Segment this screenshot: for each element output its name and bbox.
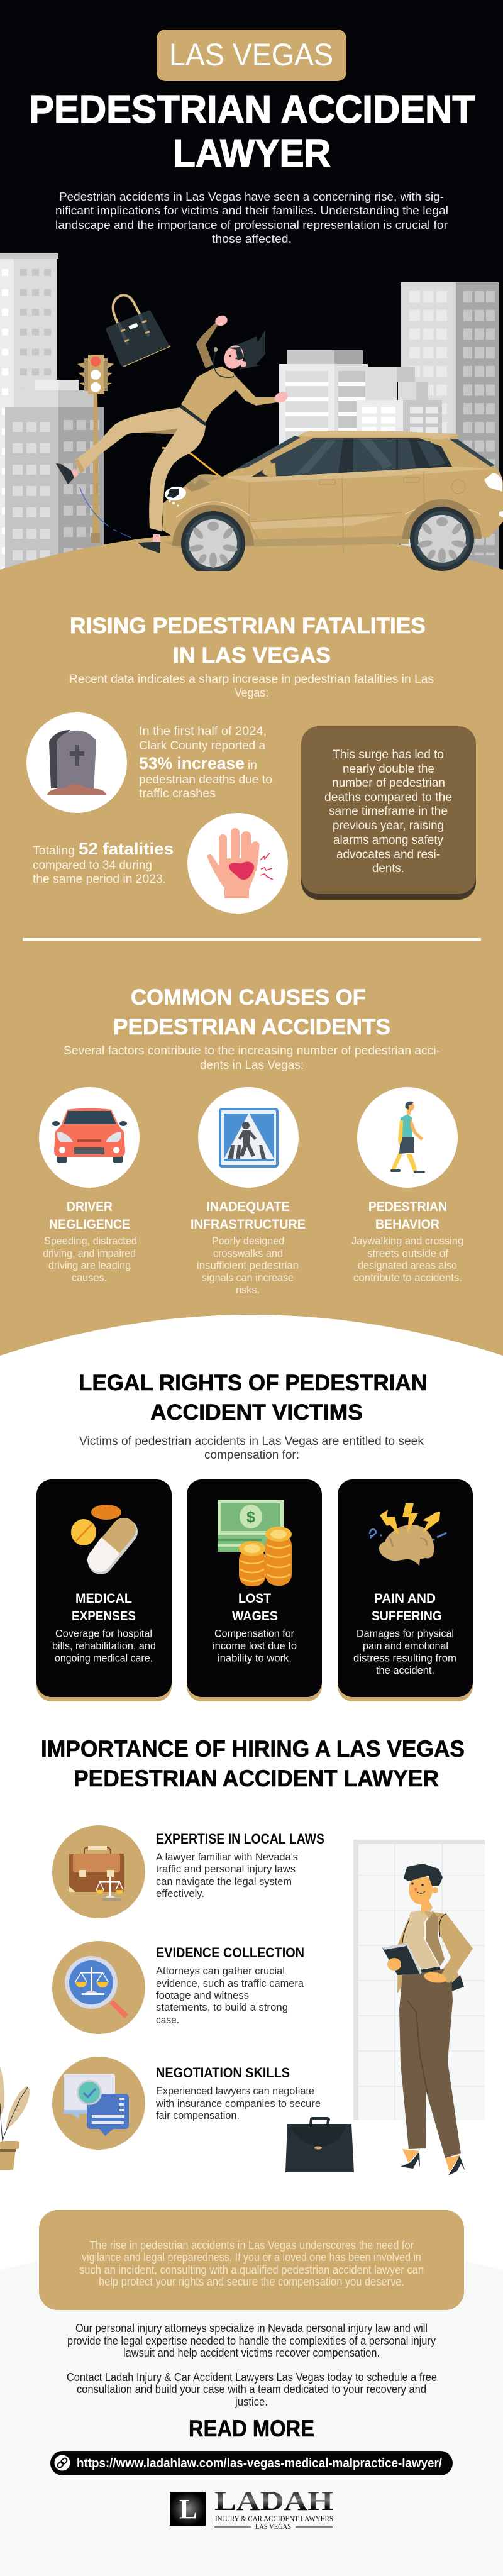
cause: driver negligence: driving are leading <box>48 1259 131 1271</box>
icon: brain with lightning <box>370 1503 446 1566</box>
falling woman <box>56 314 289 553</box>
card: medical expenses: Coverage for hospital <box>55 1627 152 1640</box>
cause: driver negligence: Speeding, distracted <box>44 1235 137 1247</box>
cause: inadequate infrastructure: risks. <box>236 1284 260 1296</box>
section: legal rights heading: LEGAL RIGHTS OF PEDESTRIAN <box>79 1371 427 1395</box>
stat: 52 fatalities: Totaling <box>33 844 75 858</box>
right buildings <box>279 282 499 578</box>
potted plant <box>0 2067 30 2170</box>
callout: surge box: This surge has led to <box>333 748 444 761</box>
cause: inadequate infrastructure: signals can increase <box>202 1271 294 1284</box>
stat: 53% increase <box>139 725 272 800</box>
title <box>29 88 475 175</box>
car <box>162 431 503 553</box>
card: pain and suffering: the accident. <box>376 1664 434 1676</box>
cause: inadequate infrastructure <box>191 1200 306 1296</box>
importance: evidence collection: statements, to build a strong <box>156 2001 288 2013</box>
read more heading: READ MORE <box>189 2416 314 2441</box>
callout: surge box <box>301 726 476 900</box>
title: LAWYER <box>173 132 331 175</box>
callout: surge box: dents. <box>372 862 404 875</box>
legal rights intro <box>79 1435 424 1462</box>
importance: evidence collection <box>156 1945 304 2026</box>
section: legal rights heading: ACCIDENT VICTIMS <box>150 1400 363 1425</box>
icon: tombstone <box>26 712 127 813</box>
closing paragraph: contact: consultation and build your case with a team dedicated to your recovery and <box>77 2383 426 2396</box>
conclusion box: such an incident, consulting with a qualified pedestrian accident lawyer can <box>79 2264 424 2276</box>
link pill: https://www.ladahlaw.com/las-vegas-medical-malpractice-lawyer/ <box>77 2457 442 2470</box>
conclusion box: help protect your rights and secure the compensation you deserve. <box>99 2275 404 2288</box>
cause: driver negligence <box>43 1200 137 1284</box>
black briefcase <box>285 2117 354 2172</box>
icon: pedestrian crossing sign <box>198 1087 299 1188</box>
conclusion box: vigilance and legal preparedness. If you or a loved one has been involved in <box>82 2251 421 2264</box>
closing paragraph: attorneys: provide the legal expertise needed to handle the complexities of a personal injury <box>67 2335 436 2347</box>
section: rising fatalities heading <box>70 614 426 668</box>
card: lost wages: WAGES <box>232 1609 278 1623</box>
section: legal rights heading <box>79 1371 427 1425</box>
badge: Las Vegas: LAS VEGAS <box>169 37 333 72</box>
callout: surge box: previous year, raising <box>333 819 444 832</box>
section: common causes heading <box>113 985 390 1039</box>
lawyer figure <box>382 1864 473 2175</box>
window backdrop <box>353 1840 485 2120</box>
logo: LADAH <box>214 2487 333 2516</box>
intro paragraph: Pedestrian accidents in Las Vegas have seen a concerning rise, with sig- <box>59 191 444 203</box>
logo <box>170 2487 333 2531</box>
callout: surge box: deaths compared to the <box>324 791 452 804</box>
fatalities intro: Recent data indicates a sharp increase in pedestrian fatalities in Las <box>69 673 434 686</box>
card: pain and suffering: distress resulting from <box>353 1652 456 1664</box>
flying handbag <box>108 295 171 367</box>
section: rising fatalities heading: IN LAS VEGAS <box>173 643 331 668</box>
cause: pedestrian behavior: PEDESTRIAN <box>368 1200 447 1214</box>
conclusion box <box>39 2210 464 2310</box>
causes intro: Several factors contribute to the increasing number of pedestrian acci- <box>64 1044 440 1058</box>
section: importance heading: IMPORTANCE OF HIRING A LAS VEGAS <box>41 1736 465 1762</box>
importance: negotiation skills: Experienced lawyers can negotiate <box>156 2085 314 2097</box>
cause: driver negligence: causes. <box>72 1271 107 1284</box>
closing paragraph: attorneys: Our personal injury attorneys specialize in Nevada personal injury law and will <box>75 2322 428 2335</box>
conclusion box: The rise in pedestrian accidents in Las Vegas underscores the need for <box>89 2239 414 2252</box>
cause: inadequate infrastructure: INFRASTRUCTURE <box>191 1217 306 1232</box>
intro paragraph <box>55 191 448 245</box>
importance: expertise in local laws: A lawyer familiar with Nevada's <box>156 1851 298 1863</box>
cause: inadequate infrastructure: crosswalks and <box>213 1247 283 1259</box>
importance: evidence collection: evidence, such as traffic camera <box>156 1977 304 1989</box>
card: lost wages: income lost due to <box>213 1640 297 1652</box>
importance: evidence collection: Attorneys can gather crucial <box>156 1965 285 1977</box>
cause: driver negligence: NEGLIGENCE <box>49 1217 130 1232</box>
cause: pedestrian behavior: streets outside of <box>367 1247 448 1259</box>
importance: evidence collection: case. <box>156 2014 179 2026</box>
importance: negotiation skills <box>155 2065 321 2121</box>
closing paragraph: contact <box>67 2371 437 2408</box>
stat: 53% increase: 53% increase <box>139 754 245 773</box>
stat: 53% increase: pedestrian deaths due to <box>139 773 272 787</box>
icon: pills <box>71 1505 125 1562</box>
card: medical expenses <box>36 1479 172 1701</box>
card: lost wages: inability to work. <box>218 1652 292 1664</box>
icon: money and coins: $ <box>246 1508 255 1526</box>
importance: expertise in local laws: traffic and personal injury laws <box>156 1863 296 1875</box>
cause: inadequate infrastructure: INADEQUATE <box>206 1200 290 1214</box>
yellow tape <box>162 448 221 477</box>
closing paragraph: contact: justice. <box>235 2396 268 2408</box>
callout: surge box: number of pedestrian <box>332 777 445 790</box>
fatalities intro: Vegas: <box>235 687 268 700</box>
title: PEDESTRIAN ACCIDENT <box>29 88 475 131</box>
stat: 53% increase: in <box>248 759 257 772</box>
importance: evidence collection: EVIDENCE COLLECTION <box>156 1945 304 1960</box>
cause: pedestrian behavior: designated areas also <box>358 1259 457 1271</box>
importance: expertise in local laws: EXPERTISE IN LOCAL LAWS <box>156 1831 324 1847</box>
cause: pedestrian behavior: contribute to accidents. <box>353 1271 462 1284</box>
importance: evidence collection: footage and witness <box>156 1989 249 2001</box>
intro paragraph: those affected. <box>212 233 292 245</box>
cause: inadequate infrastructure: insufficient pedestrian <box>197 1259 299 1271</box>
left buildings <box>0 253 104 577</box>
icon: magnifier with scales <box>52 1941 145 2034</box>
card: lost wages: LOST <box>238 1591 271 1606</box>
importance: expertise in local laws: effectively. <box>156 1888 204 1899</box>
stat: 53% increase: In the first half of 2024, <box>139 725 267 738</box>
importance: expertise in local laws <box>156 1831 324 1899</box>
card: pain and suffering: PAIN AND <box>374 1591 436 1606</box>
importance: expertise in local laws: can navigate the legal system <box>156 1876 292 1888</box>
card: pain and suffering <box>338 1479 473 1701</box>
importance: negotiation skills: fair compensation. <box>156 2109 240 2121</box>
cause: inadequate infrastructure: Poorly designed <box>212 1235 284 1247</box>
section: importance heading: PEDESTRIAN ACCIDENT LAWYER <box>74 1766 439 1791</box>
icon: walking person <box>357 1087 458 1188</box>
card: pain and suffering: SUFFERING <box>372 1609 442 1623</box>
section: importance heading <box>41 1736 465 1791</box>
card: medical expenses: EXPENSES <box>72 1609 136 1623</box>
card: lost wages: Compensation for <box>214 1627 294 1640</box>
icon: injured hand <box>187 813 288 914</box>
logo: L <box>179 2494 197 2524</box>
stat: 52 fatalities: compared to 34 during <box>33 859 152 872</box>
intro paragraph: nificant implications for victims and their families. Understanding the legal <box>55 204 448 217</box>
badge: Las Vegas <box>157 30 346 81</box>
closing paragraph: attorneys: lawsuit and help accident victims recover compensation. <box>123 2347 380 2359</box>
icon: link <box>54 2455 70 2471</box>
closing paragraph: contact: Contact Ladah Injury & Car Accident Lawyers Las Vegas today to schedule a free <box>67 2371 437 2384</box>
hero background <box>0 0 503 578</box>
causes intro <box>64 1044 440 1072</box>
callout: surge box: advocates and resi- <box>336 848 440 861</box>
traffic light <box>77 355 114 543</box>
cause: driver negligence: driving, and impaired <box>43 1247 136 1259</box>
intro paragraph: landscape and the importance of professional representation is crucial for <box>55 219 448 231</box>
cause: driver negligence: DRIVER <box>67 1200 113 1214</box>
rear wheel <box>410 507 474 571</box>
stat: 53% increase: traffic crashes <box>139 787 216 800</box>
icon: briefcase with scales <box>52 1825 145 1918</box>
callout: surge box: nearly double the <box>343 763 434 776</box>
stat: 52 fatalities: the same period in 2023. <box>33 873 166 886</box>
section: common causes heading: PEDESTRIAN ACCIDENTS <box>113 1015 390 1039</box>
icon: red car <box>39 1087 140 1188</box>
card: pain and suffering: pain and emotional <box>363 1640 448 1652</box>
importance: negotiation skills: with insurance companies to secure <box>155 2098 321 2109</box>
stat: 52 fatalities: 52 fatalities <box>79 839 174 858</box>
callout: surge box: alarms among safety <box>333 834 443 847</box>
closing paragraph: attorneys <box>67 2322 436 2359</box>
fatalities intro <box>69 673 434 700</box>
legal rights intro: compensation for: <box>204 1449 299 1462</box>
card: lost wages <box>187 1479 322 1701</box>
white section background <box>0 1315 503 2289</box>
card: pain and suffering: Damages for physical <box>357 1627 454 1640</box>
front wheel <box>181 511 245 575</box>
icon: money and coins <box>218 1500 292 1586</box>
callout: surge box: same timeframe in the <box>329 805 448 818</box>
importance: negotiation skills: NEGOTIATION SKILLS <box>156 2065 290 2081</box>
legal rights intro: Victims of pedestrian accidents in Las Vegas are entitled to seek <box>79 1435 424 1448</box>
cause: pedestrian behavior <box>351 1200 463 1284</box>
card: medical expenses: MEDICAL <box>75 1591 132 1606</box>
logo: LAS VEGAS <box>255 2522 291 2531</box>
stat: 53% increase: Clark County reported a <box>139 739 265 753</box>
lower pale background <box>0 2238 503 2576</box>
ground curve and gold section background <box>0 531 503 1364</box>
section: rising fatalities heading: RISING PEDESTRIAN FATALITIES <box>70 614 426 638</box>
section: common causes heading: COMMON CAUSES OF <box>131 985 366 1010</box>
stat: 52 fatalities <box>33 839 174 886</box>
cause: pedestrian behavior: BEHAVIOR <box>375 1217 439 1232</box>
card: medical expenses: ongoing medical care. <box>55 1652 153 1664</box>
link pill <box>50 2451 453 2475</box>
logo: INJURY & CAR ACCIDENT LAWYERS <box>215 2514 333 2523</box>
card: medical expenses: bills, rehabilitation, and <box>52 1640 156 1652</box>
causes intro: dents in Las Vegas: <box>200 1059 304 1072</box>
icon: chat bubbles with check <box>52 2057 145 2150</box>
cause: pedestrian behavior: Jaywalking and crossing <box>351 1235 463 1247</box>
